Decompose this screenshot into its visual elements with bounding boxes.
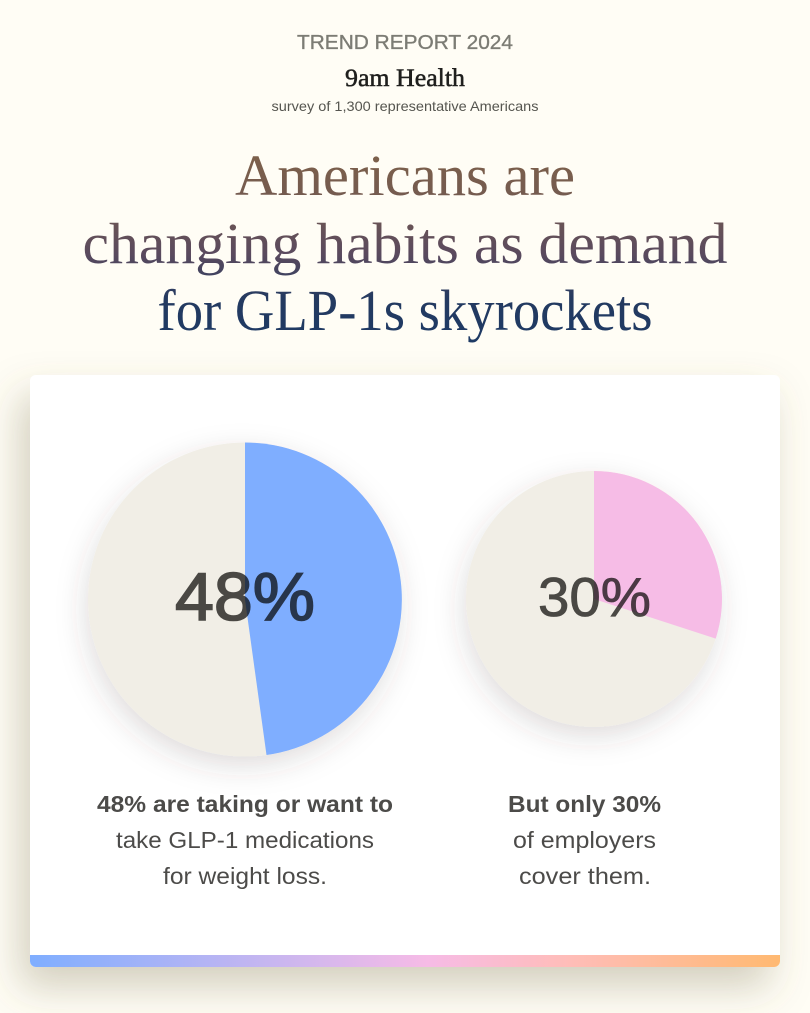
panel: survey results card — [30, 375, 780, 967]
caption: 30% statistic: of employers — [513, 827, 656, 853]
caption: 30% statistic — [508, 791, 661, 889]
title: Americans are — [235, 143, 575, 208]
survey note: survey of 1,300 representative Americans — [272, 98, 538, 114]
logo: 9am Health: 9am Health — [345, 65, 466, 92]
caption: 48% statistic — [97, 791, 393, 889]
pie chart: 30% — [466, 471, 722, 727]
caption: 48% statistic: for weight loss. — [163, 863, 327, 889]
caption: 48% statistic: take GLP-1 medications — [116, 827, 374, 853]
title: for GLP-1s skyrockets — [158, 278, 652, 343]
caption: 30% statistic: cover them. — [519, 863, 651, 889]
pie chart: 48% — [88, 442, 402, 756]
caption: 48% statistic: 48% are taking or want to — [97, 791, 393, 817]
pie chart: 48%: 48% — [175, 559, 315, 635]
caption: 30% statistic: But only 30% — [508, 791, 661, 817]
gradient footer bar — [30, 955, 780, 967]
title: changing habits as demand — [82, 211, 728, 276]
title — [82, 143, 728, 343]
header: report label: TREND REPORT 2024 — [297, 31, 513, 54]
pie chart: 30%: 30% — [538, 566, 651, 628]
